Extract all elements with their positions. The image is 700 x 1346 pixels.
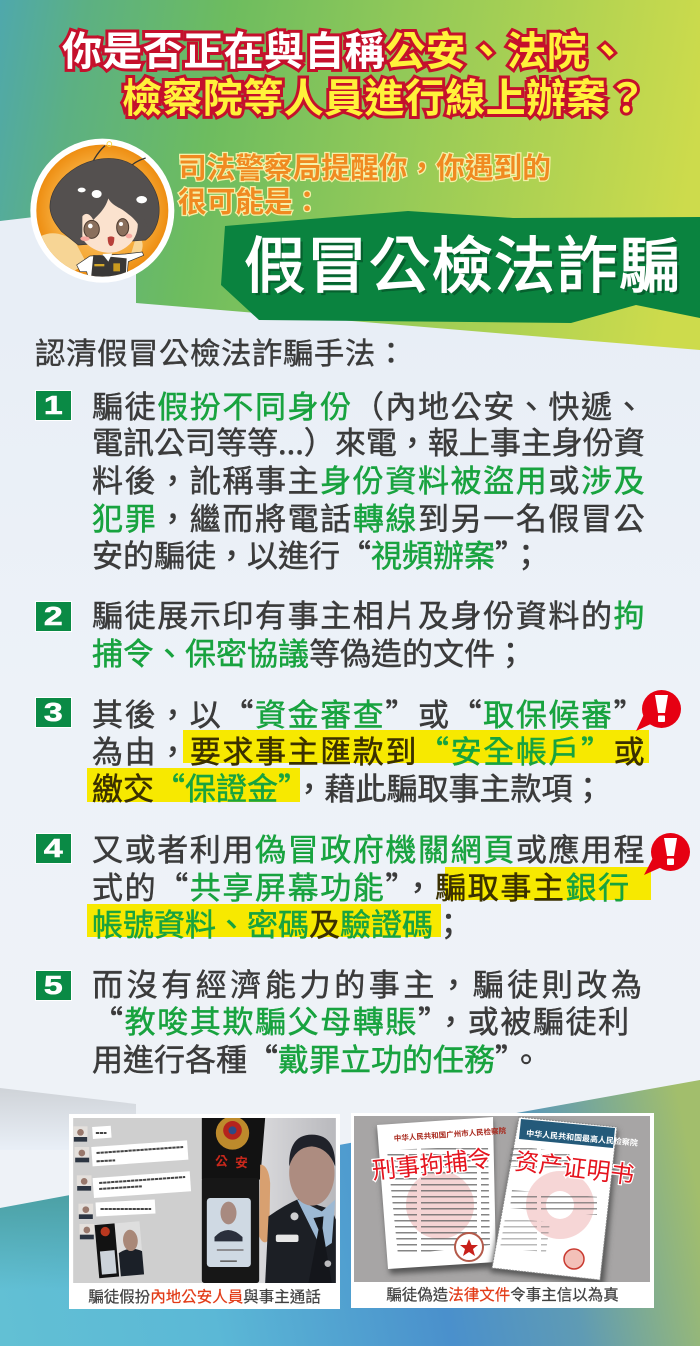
step 5 text xyxy=(92,960,646,1080)
photo panel: forged legal documents xyxy=(351,1113,654,1308)
photo: chat and police ID xyxy=(73,1118,336,1283)
title: 檢察院等人員進行線上辦案？ xyxy=(122,66,647,124)
caption: 騙徒假扮內地公安人員與事主通話 xyxy=(88,1285,321,1307)
number badge 2: 2 xyxy=(44,601,63,631)
step 1 text: 電訊公司等等...）來電，報上事主身份資 xyxy=(92,418,645,463)
step 4 text: 式的“共享屏幕功能”，騙取事主銀行 xyxy=(92,863,631,908)
subheading: reminder from Judiciary Police: 很可能是： xyxy=(178,180,321,221)
step 4 xyxy=(35,825,651,945)
step 1 text: 料後，訛稱事主身份資料被盜用或涉及 xyxy=(92,456,646,501)
step 5 text: 而沒有經濟能力的事主，騙徒則改為 xyxy=(92,960,646,1005)
number badge 4 xyxy=(35,833,72,864)
subheading: reminder from Judiciary Police xyxy=(176,146,551,221)
banner heading: 假冒公檢法詐騙 xyxy=(244,216,682,305)
step 2 xyxy=(35,591,646,674)
photo: forged warrant and asset certificate xyxy=(354,1116,650,1282)
step 5 xyxy=(35,960,646,1080)
photo: forged warrant and asset certificate: 中华人民共和国最高人民检察院 xyxy=(526,1128,638,1149)
highlight line 3 xyxy=(87,768,300,802)
step 2 text: 騙徒展示印有事主相片及身份資料的拘 xyxy=(92,591,646,636)
number badge 3 xyxy=(35,697,72,728)
photo: chat and police ID: 公 xyxy=(215,1151,228,1170)
step 3 text: 繳交“保證金”，藉此騙取事主款項； xyxy=(92,764,604,809)
number badge 3: 3 xyxy=(44,697,63,727)
number badge 5: 5 xyxy=(44,970,63,1000)
step 3 text: 其後，以“資金審查”或“取保候審” xyxy=(92,690,646,735)
title xyxy=(58,19,647,124)
mascot: police officer cartoon in circle xyxy=(30,138,174,282)
step 3 text: 為由，要求事主匯款到“安全帳戶”或 xyxy=(92,727,646,772)
photo: chat and police ID: 安 xyxy=(235,1152,248,1171)
number badge 1 xyxy=(35,390,72,421)
caption: 騙徒偽造法律文件令事主信以為真 xyxy=(386,1283,619,1305)
step 1 text: 騙徒假扮不同身份（內地公安、快遞、 xyxy=(92,382,646,427)
icon: alert bubble 2 xyxy=(644,833,690,875)
number badge 2 xyxy=(35,601,72,632)
step 2 text xyxy=(92,591,646,674)
banner: dark green xyxy=(221,211,700,323)
step 1 xyxy=(35,382,646,576)
section heading: 認清假冒公檢法詐騙手法： xyxy=(35,329,407,373)
highlight line 3 xyxy=(87,904,441,937)
highlight line 2 xyxy=(183,730,649,763)
photo: forged warrant and asset certificate: 中华人民共和国广州市人民检察院 xyxy=(393,1125,507,1144)
step 4 text: 帳號資料、密碼及驗證碼； xyxy=(92,900,464,945)
step 5 text: “教唆其欺騙父母轉賬”，或被騙徒利 xyxy=(92,997,631,1042)
step 3 text xyxy=(92,690,646,809)
number badge 5 xyxy=(35,970,72,1001)
step 4 text xyxy=(92,825,646,945)
step 4 text: 又或者利用偽冒政府機關網頁或應用程 xyxy=(92,825,646,870)
highlight line 2 xyxy=(445,867,651,900)
number badge 1: 1 xyxy=(44,390,63,420)
number badge 4: 4 xyxy=(44,833,63,863)
title: 你是否正在與自稱公安、法院、 xyxy=(62,19,628,77)
step 5 text: 用進行各種“戴罪立功的任務”。 xyxy=(92,1035,542,1080)
step 2 text: 捕令、保密協議等偽造的文件； xyxy=(92,629,526,674)
subheading: reminder from Judiciary Police: 司法警察局提醒你，你遇到的 xyxy=(178,146,551,187)
step 3 xyxy=(35,690,649,809)
step 1 text: 犯罪，繼而將電話轉線到另一名假冒公 xyxy=(92,494,646,539)
step 1 text: 安的騙徒，以進行“視頻辦案”； xyxy=(92,531,542,576)
photo: forged warrant and asset certificate: 刑事拘捕令 xyxy=(370,1139,493,1186)
icon: alert bubble 1 xyxy=(636,690,681,731)
photo: forged warrant and asset certificate: 资产证明书 xyxy=(513,1141,637,1191)
step 1 text xyxy=(92,382,646,576)
photo panel: fake police video call xyxy=(69,1114,340,1309)
